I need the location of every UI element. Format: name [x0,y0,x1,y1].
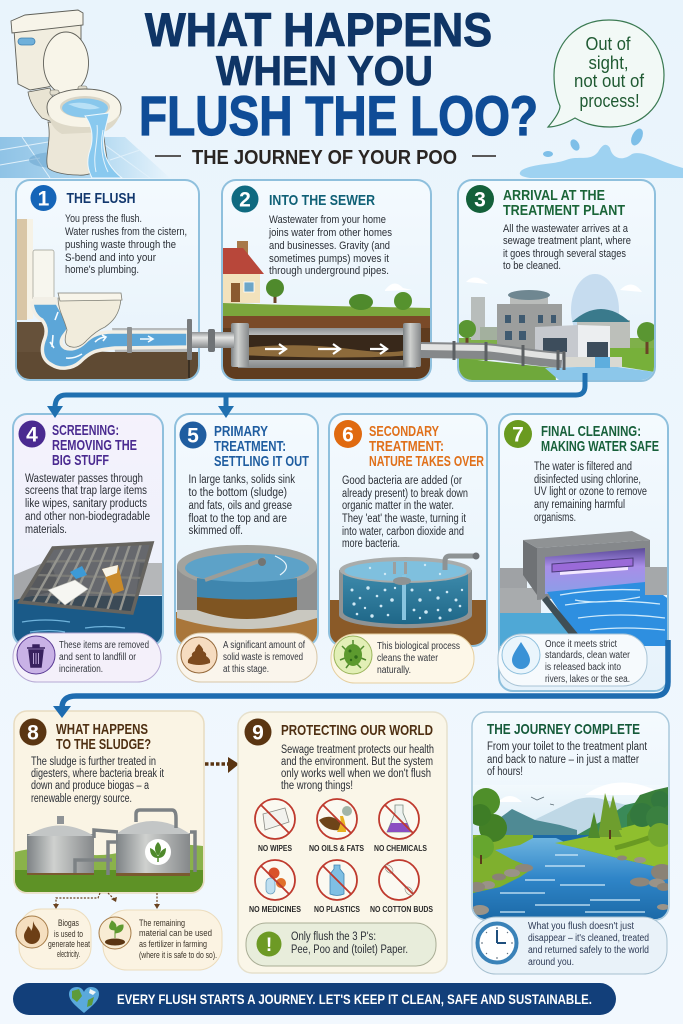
body text: to be cleaned. [503,260,561,272]
body text: materials. [25,524,67,536]
body text: and businesses. Gravity (and [269,240,390,252]
body text: any remaining harmful [534,499,625,511]
icon: no medicines: NO MEDICINES [249,905,301,914]
callout: only flush the 3 Ps: ! [266,935,272,956]
body text: organic matter in the water. [342,500,454,512]
icon: seedling [99,917,131,949]
illustration: treatment plant [458,274,657,381]
callout: speech bubble: Out of [586,34,631,54]
water splash [520,127,683,178]
body text: Water rushes from the cistern, [65,226,187,238]
body text: and back to nature – in just a matter [487,754,639,766]
body text [25,473,150,536]
callout: speech bubble: not out of [574,71,645,91]
body text: down and produce biogas – a [31,780,149,792]
heading [503,187,625,219]
body text: sewage treatment plant, where [503,235,631,247]
heading: TREATMENT: [369,438,444,455]
step number 8: 8 [27,722,39,744]
body text: home's plumbing. [65,264,139,276]
panel: the journey complete [469,712,673,974]
note: clean water released: is released back into [545,662,621,673]
callout: only flush the 3 Ps: Pee, Poo and (toilet) Paper. [291,944,408,956]
body text: like wipes, sanitary products [25,498,147,510]
icon: no chemicals: NO CHEMICALS [374,844,427,853]
icon: no cotton buds: NO COTTON BUDS [370,905,433,914]
illustration: screen grate [14,543,162,646]
note: clean water released: standards, clean water [545,650,631,661]
icon: no oils and fats: NO OILS & FATS [309,844,364,853]
callout: only flush the 3 Ps: Only flush the 3 P's: [291,931,376,943]
panel: step 8 sludge [14,711,204,894]
title: WHEN YOU [216,47,433,94]
body text: From your toilet to the treatment plant [487,741,648,753]
note: biological process: naturally. [377,665,411,676]
callout: fertilizer [99,910,222,970]
step number 8 [20,718,46,746]
heading: TO THE SLUDGE? [56,736,151,753]
heading: PROTECTING OUR WORLD [281,722,433,739]
callout: biogas: is used to [54,929,83,939]
body text: screens that trap large items [25,485,147,497]
illustration: digesters [15,810,204,894]
step number 3 [466,185,494,213]
body text: into water, carbon dioxide and [342,526,464,538]
illustration: settling tank [176,545,317,646]
body text [503,223,631,272]
body text: skimmed off. [188,525,243,537]
icon: no medicines [249,860,301,914]
icon: no chemicals [374,799,427,853]
note: biological process: This biological process [377,641,460,652]
step number 4 [18,420,46,448]
heading [214,423,309,470]
note: clean water released [498,634,647,686]
heading [541,423,659,455]
body text [65,213,187,276]
body text [487,741,648,778]
callout: biogas: Biogas [58,918,79,928]
heading: BIG STUFF [52,452,109,469]
connecting pipe between step 2 and 3 [421,341,564,370]
icon: leaf badge [145,839,171,865]
title: WHAT HAPPENS [145,3,492,56]
body text: and other non-biodegradable [25,511,150,523]
illustration: house and sewer pipe [222,241,431,380]
illustration: s-bend under toilet [17,219,199,379]
arrow: step 7 to step 8 [53,640,668,718]
note: biological process: cleans the water [377,653,439,664]
body text: digesters, where bacteria break it [31,768,165,780]
callout: fertilizer: (where it is safe to do so). [139,950,217,960]
step number 7 [504,420,532,448]
step number 1 [30,185,56,211]
step number 3: 3 [474,188,486,212]
note: solid waste removed: solid waste is removed [223,652,303,663]
body text: Sewage treatment protects our health [281,744,434,756]
icon: flame [16,916,48,948]
icon: no cotton buds [370,860,433,914]
body text: All the wastewater arrives at a [503,223,629,235]
note: solid waste removed: at this stage. [223,664,269,675]
callout: speech bubble [548,20,664,127]
note: solid waste removed: A significant amount of [223,640,305,651]
illustration: aeration tank [330,552,486,646]
title: FLUSH THE LOO? [139,84,538,147]
icon: no wipes: NO WIPES [258,844,292,853]
heading: THE FLUSH [66,190,136,207]
floor tiles [0,137,170,178]
body text: The water is filtered and [534,461,632,473]
arrow: step 8 to step 9 [205,757,239,773]
icon: water drop [502,636,540,674]
body text: only works well when we don't flush [281,768,431,780]
step number 9 [244,718,272,746]
panel: step 6 secondary treatment [329,414,487,683]
icon: flushing toilet [11,10,122,178]
body text: and fats, oils and grease [188,500,292,512]
note: items removed: incineration. [59,664,103,675]
note: what you flush: and returned safely to the world [528,945,649,956]
body text: You press the flush. [65,213,142,225]
callout: biogas [16,909,91,969]
illustration: UV channel [500,531,670,646]
dotted arrows from step 8 [53,893,160,909]
body text: Wastewater passes through [25,473,143,485]
heading: WHAT HAPPENS [56,721,148,738]
heading: SECONDARY [369,423,439,440]
icon: bacteria [334,636,372,674]
step number 5 [180,422,206,448]
title [139,3,538,147]
step number 5: 5 [187,424,199,448]
body text: of hours! [487,766,523,778]
callout: fertilizer: The remaining [139,918,185,928]
step number 7: 7 [512,424,524,446]
body text: In large tanks, solids sink [188,474,295,486]
icon: poo [181,637,217,673]
panel: step 1 the flush [16,180,199,380]
icon: no plastics [314,860,360,914]
step number 9: 9 [252,722,264,744]
icon: clock [478,924,516,962]
subtitle: THE JOURNEY OF YOUR POO [192,147,457,169]
note: what you flush: around you. [528,957,574,968]
note: what you flush: What you flush doesn't just [528,921,634,932]
body text: Good bacteria are added (or [342,475,462,487]
body text: They 'eat' the waste, turning it [342,513,467,525]
heading [52,422,137,469]
step number 4: 4 [26,424,38,446]
callout: speech bubble: process! [580,91,640,111]
panel: step 2 into the sewer [222,180,431,380]
body text: more bacteria. [342,538,400,550]
body text [342,475,468,550]
body text [534,461,647,524]
footer banner [13,983,616,1015]
note: clean water released: rivers, lakes or the sea. [545,674,630,685]
heading: SCREENING: [52,422,119,439]
note: what you flush [472,917,667,974]
body text [268,214,392,277]
heading: SETTLING IT OUT [214,453,309,470]
body text [281,744,434,792]
callout: biogas: generate heat [48,939,90,949]
body text: pushing waste through the [65,239,176,251]
callout: fertilizer: material can be used [139,928,212,938]
icon: no plastics: NO PLASTICS [314,905,360,914]
heading: THE JOURNEY COMPLETE [487,721,640,738]
note: biological process [331,634,474,683]
heading: PRIMARY [214,423,268,440]
callout: fertilizer: as fertilizer in farming [139,939,207,949]
note: items removed: and sent to landfill or [59,652,137,663]
body text [31,756,165,805]
heading: TREATMENT: [214,438,286,455]
body text: to the bottom (sludge) [188,487,287,499]
panel: step 4 screening [13,414,163,682]
illustration: river landscape [469,782,673,919]
body text: renewable energy source. [31,793,132,805]
heading: TREATMENT PLANT [503,202,625,219]
heading: NATURE TAKES OVER [369,453,484,470]
body text: the wrong things! [281,780,353,792]
connecting pipe between step 1 and 2 [192,329,234,352]
body text: joins water from other homes [268,227,392,239]
body text [188,474,295,537]
note: items removed: These items are removed [59,640,149,651]
heading [369,423,484,470]
step number 2: 2 [239,188,251,212]
body text: UV light or ozone to remove [534,486,647,498]
body text: disinfected using chlorine, [534,474,641,486]
footer banner: EVERY FLUSH STARTS A JOURNEY. LET'S KEEP IT CLEAN, SAFE AND SUSTAINABLE. [117,992,592,1007]
callout: only flush the 3 Ps [246,923,436,966]
body text: float to the top and are [188,513,287,525]
step number 6 [334,420,362,448]
step number 1: 1 [38,188,50,210]
body text: already present) to break down [342,488,468,500]
heading: ARRIVAL AT THE [503,187,605,204]
heading: REMOVING THE [52,437,137,454]
note: clean water released: Once it meets strict [545,639,617,650]
heading: FINAL CLEANING: [541,423,641,440]
body text: through underground pipes. [269,265,389,277]
note: what you flush: disappear – it's cleaned, treated [528,933,649,944]
panel: step 5 primary treatment [175,414,318,682]
heading [56,721,151,753]
body text: S-bend and into your [65,252,156,264]
step number 2 [232,186,258,212]
callout: biogas: electricity. [57,949,80,959]
body text: Wastewater from your home [269,214,386,226]
step number 6: 6 [342,424,354,446]
icon: no oils and fats [309,799,364,853]
panel: step 7 final cleaning [498,414,670,691]
body text: it goes through several stages [503,248,626,260]
note: items removed [13,633,161,682]
body text: and the environment. But the system [281,756,433,768]
icon: no wipes [255,799,295,853]
icon: bin [17,636,55,674]
panel: step 9 protecting our world [238,712,447,973]
arrow: step 3 to steps 4 and 5 [47,373,585,418]
note: solid waste removed [177,633,317,682]
body text: organisms. [534,512,576,524]
callout: speech bubble: sight, [588,53,628,73]
heading: INTO THE SEWER [269,192,375,209]
body text: The sludge is further treated in [31,756,156,768]
icon: heart globe [69,987,99,1013]
panel: step 3 arrival at treatment plant [458,180,657,381]
body text: sometimes pumps) moves it [269,253,389,265]
